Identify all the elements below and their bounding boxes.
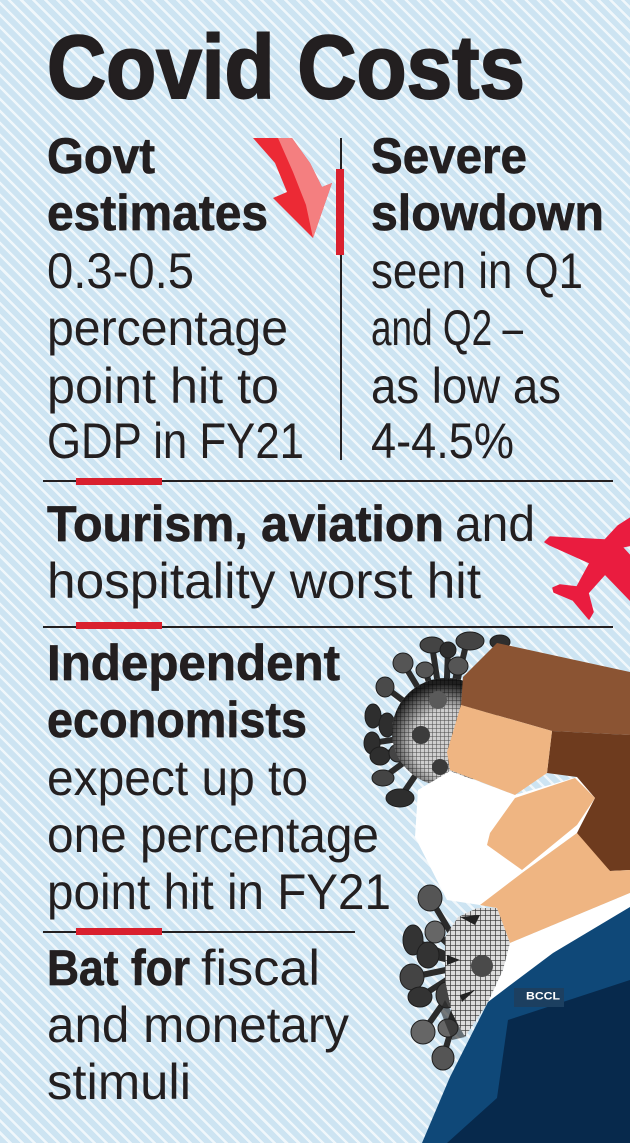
- text block: govt estimates: Govt: [47, 128, 155, 184]
- text block: independent economists: economists: [47, 692, 307, 748]
- illustration: mask patch skin: [487, 778, 595, 870]
- illustration: suit dark panel: [447, 980, 630, 1143]
- divider 3: [43, 928, 355, 935]
- illustration: dark side of head: [547, 731, 630, 871]
- text block: bat for stimuli: [47, 940, 349, 1110]
- text block: tourism: hospitality worst hit: [47, 553, 481, 609]
- divider 1: [43, 478, 613, 485]
- text block: severe slowdown: Severe: [371, 128, 527, 184]
- illustration: head hair: [461, 643, 630, 735]
- illustration: suit: [422, 907, 630, 1143]
- text block: independent economists: point hit in FY21: [47, 864, 391, 920]
- text block: severe slowdown: [371, 128, 604, 469]
- text block: govt estimates: GDP in FY21: [47, 413, 304, 469]
- text block: bat for stimuli: Bat for: [47, 940, 190, 996]
- text block: severe slowdown: slowdown: [371, 185, 604, 241]
- text block: tourism: and: [455, 496, 535, 552]
- text block: independent economists: [47, 635, 391, 920]
- text block: govt estimates: point hit to: [47, 358, 279, 414]
- illustration: virus lower: [400, 885, 510, 1070]
- illustration: upper face skin: [447, 705, 552, 795]
- illustration: neck skin: [480, 833, 630, 943]
- credit label: BCCL: [526, 990, 560, 1002]
- text block: independent economists: Independent: [47, 635, 340, 691]
- text block: bat for stimuli: fiscal: [201, 940, 320, 996]
- text block: tourism: Tourism, aviation: [47, 496, 444, 552]
- text block: govt estimates: estimates: [47, 185, 268, 241]
- icon: red plane: [545, 517, 630, 619]
- title: Covid Costs: [47, 18, 525, 118]
- credit label: [514, 988, 564, 1007]
- column divider with red marker: [336, 138, 344, 460]
- text block: independent economists: one percentage: [47, 807, 379, 863]
- text block: govt estimates: [47, 128, 304, 469]
- text block: severe slowdown: 4-4.5%: [371, 413, 514, 469]
- text block: govt estimates: percentage: [47, 300, 288, 356]
- illustration: virus upper: [364, 632, 510, 807]
- text block: tourism: [47, 496, 535, 609]
- text block: independent economists: expect up to: [47, 750, 308, 806]
- illustration: mask and lower face: [415, 771, 600, 905]
- text block: severe slowdown: as low as: [371, 358, 561, 414]
- text block: bat for stimuli: stimuli: [47, 1054, 191, 1110]
- text block: severe slowdown: and Q2 –: [371, 300, 523, 356]
- illustration: shirt collar: [488, 893, 630, 1002]
- icon: red down arrow: [253, 138, 332, 238]
- text block: govt estimates: 0.3-0.5: [47, 243, 194, 299]
- text block: severe slowdown: seen in Q1: [371, 243, 583, 299]
- divider 2: [43, 622, 613, 629]
- text block: bat for stimuli: and monetary: [47, 997, 349, 1053]
